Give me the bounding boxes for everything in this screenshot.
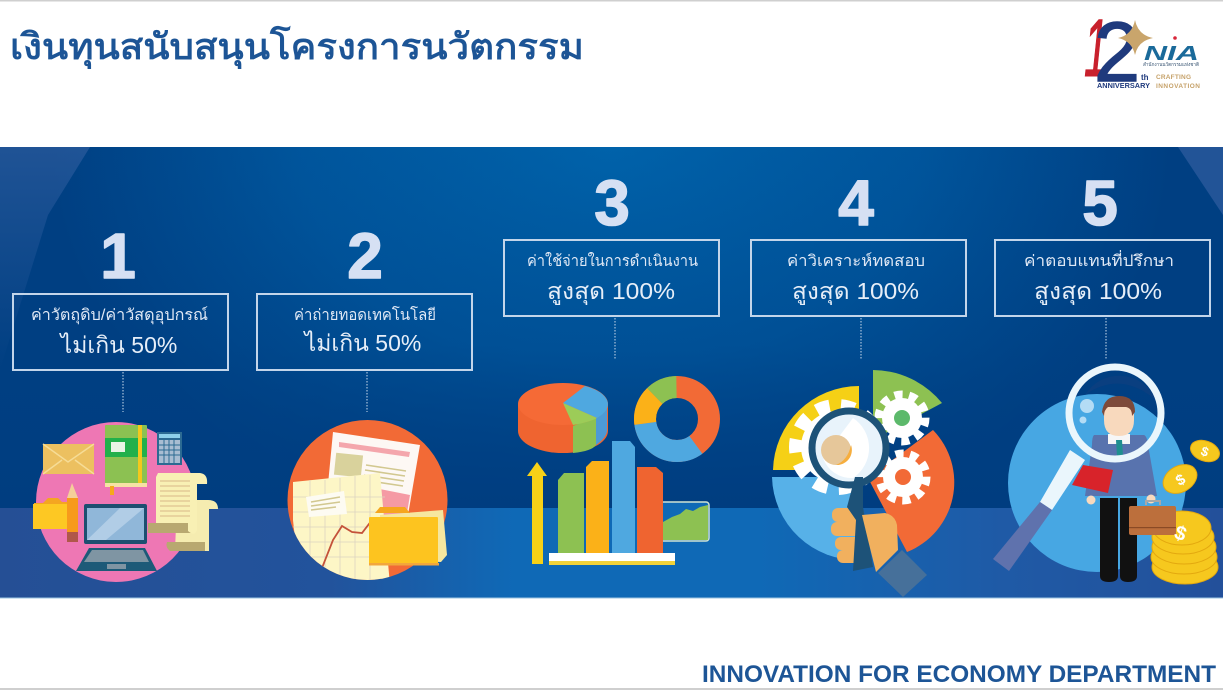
icon: 3D pie chart xyxy=(518,383,608,453)
number 4: 4 xyxy=(838,167,874,239)
handle xyxy=(847,477,873,571)
icon: documents and folder xyxy=(288,420,448,585)
head and collar xyxy=(1108,434,1130,444)
folder xyxy=(380,510,447,562)
legs xyxy=(1100,498,1118,582)
icon: consultant under magnifier: $ xyxy=(1171,522,1189,546)
connector 4 xyxy=(860,318,862,360)
icon: consultant under magnifier: $ xyxy=(1173,471,1189,490)
icon: donut chart xyxy=(645,387,709,451)
text box 5 xyxy=(995,240,1210,316)
icon: office supplies xyxy=(33,422,218,582)
connector 3 xyxy=(614,318,616,360)
icon: consultant under magnifier: $ xyxy=(1199,443,1212,460)
text box 1: ค่าวัตถุดิบ/ค่าวัสดุอุปกรณ์ xyxy=(31,306,208,325)
column 3: operating costs xyxy=(504,167,719,565)
column 1: raw materials xyxy=(13,220,228,582)
logo: NIA 12th anniversary: 2 xyxy=(1094,5,1140,99)
logo: NIA 12th anniversary xyxy=(1084,3,1200,99)
logo: NIA 12th anniversary: CRAFTING xyxy=(1156,74,1191,81)
folder xyxy=(34,498,68,529)
connector 2 xyxy=(366,372,368,412)
text box 4 xyxy=(751,240,966,316)
laptop xyxy=(84,504,147,544)
handle xyxy=(1040,450,1085,510)
number 5: 5 xyxy=(1082,167,1118,239)
right hand xyxy=(862,513,898,572)
footer department label: INNOVATION FOR ECONOMY DEPARTMENT xyxy=(702,661,1216,688)
first scroll xyxy=(148,523,194,533)
pencil xyxy=(67,483,78,498)
text box 1 xyxy=(13,294,228,370)
magnifier xyxy=(812,411,886,485)
icon: consultant under magnifier xyxy=(993,367,1223,584)
hands xyxy=(1086,496,1096,504)
column 4: testing and analysis xyxy=(751,167,966,597)
logo: NIA 12th anniversary: ANNIVERSARY xyxy=(1097,83,1150,90)
text box 1: ไม่เกิน 50% xyxy=(59,332,177,358)
column 5: consultant fees xyxy=(993,167,1223,584)
blue infographic panel background xyxy=(0,147,1223,598)
second scroll xyxy=(175,500,218,551)
text box 2: ค่าถ่ายทอดเทคโนโลยี xyxy=(294,306,436,324)
icon: magnifier over gears xyxy=(772,370,954,597)
logo: NIA 12th anniversary: สำนักงานนวัตกรรมแห่งชาติ xyxy=(1143,61,1199,68)
red folder xyxy=(1072,465,1113,493)
text box 2: ไม่เกิน 50% xyxy=(303,330,421,356)
title: เงินทุนสนับสนุนโครงการนวัตกรรม xyxy=(10,26,584,69)
logo: NIA 12th anniversary: th xyxy=(1141,73,1149,82)
coins xyxy=(1151,511,1218,584)
text box 3: สูงสุด 100% xyxy=(547,278,675,305)
text box 3: ค่าใช้จ่ายในการดำเนินงาน xyxy=(527,252,698,270)
number 1: 1 xyxy=(100,220,136,292)
logo: NIA 12th anniversary: NIA xyxy=(1144,43,1199,65)
text box 5: ค่าตอบแทนที่ปรึกษา xyxy=(1024,250,1174,270)
text box 5: สูงสุด 100% xyxy=(1034,278,1162,305)
briefcase xyxy=(1129,501,1176,535)
text box 4: ค่าวิเคราะห์ทดสอบ xyxy=(787,252,925,270)
icon: small area chart xyxy=(660,502,709,541)
number 2: 2 xyxy=(347,220,383,292)
logo: NIA 12th anniversary: INNOVATION xyxy=(1156,83,1200,90)
jacket xyxy=(1085,435,1157,496)
magnifier ring xyxy=(1069,367,1161,459)
connector 5 xyxy=(1105,318,1107,360)
icon: bar chart with arrow xyxy=(527,441,675,565)
text box 4: สูงสุด 100% xyxy=(792,278,919,305)
left fingers xyxy=(832,508,864,522)
gears xyxy=(797,407,877,487)
text box 3 xyxy=(504,240,719,316)
glass xyxy=(1085,376,1156,400)
column 2: technology transfer xyxy=(257,220,472,585)
logo: NIA 12th anniversary: 1 xyxy=(1084,3,1108,94)
number 3: 3 xyxy=(594,167,630,239)
connector 1 xyxy=(122,372,124,412)
text box 2 xyxy=(257,294,472,370)
